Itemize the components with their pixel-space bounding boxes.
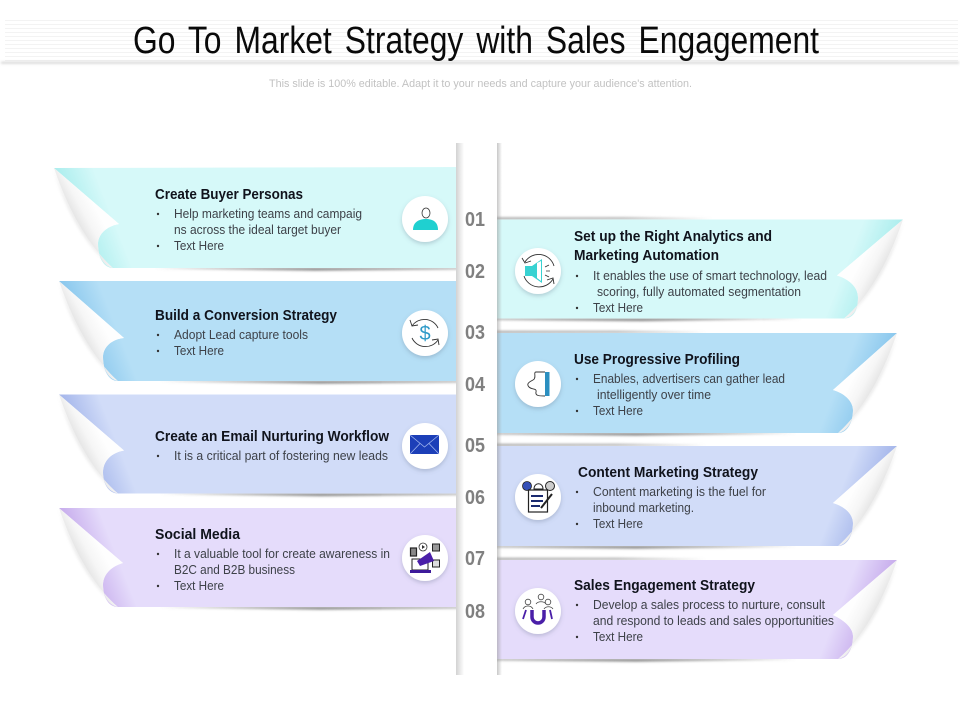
body text [157, 327, 308, 358]
panel: analytics and marketing automation [492, 218, 903, 321]
panel: create an email nurturing workflow [59, 394, 470, 496]
body text: Text Here [593, 300, 643, 315]
body text: Text Here [174, 578, 224, 593]
ribbon 5 [492, 218, 903, 321]
subtitle: This slide is 100% editable. Adapt it to your needs and capture your audience's attention. [269, 78, 692, 90]
step numbers: 05 [465, 435, 485, 457]
body text [576, 597, 834, 644]
title: Go To Market Strategy with Sales Engagement [133, 20, 819, 62]
header band [1, 18, 959, 64]
center band [456, 143, 502, 675]
body text: scoring, fully automated segmentation [597, 284, 801, 299]
heading: Set up the Right Analytics and [574, 229, 772, 245]
ribbon 2 [59, 281, 470, 384]
body text [157, 546, 390, 593]
body text: inbound marketing. [593, 500, 694, 515]
ribbon 8 [486, 558, 897, 662]
heading: Content Marketing Strategy [578, 465, 758, 481]
icon: person [402, 196, 448, 242]
body text: Adopt Lead capture tools [174, 327, 308, 342]
body text: Text Here [593, 403, 643, 418]
body text: Text Here [593, 516, 643, 531]
panel: build a conversion strategy [59, 281, 470, 384]
body text: Content marketing is the fuel for [593, 484, 767, 499]
step numbers: 01 [465, 209, 485, 231]
icon: content clipboard [515, 474, 561, 520]
body text: ns across the ideal target buyer [174, 222, 342, 237]
icon: profile door [515, 361, 561, 407]
body text [157, 206, 362, 253]
body text: It a valuable tool for create awareness in [174, 546, 390, 561]
heading: Sales Engagement Strategy [574, 578, 755, 594]
ribbon 6 [486, 331, 897, 436]
icon: dollar cycle: $ [419, 323, 431, 345]
step numbers: 03 [465, 322, 485, 344]
panel: sales engagement strategy [486, 558, 897, 662]
body text: Text Here [174, 343, 224, 358]
step numbers: 02 [465, 261, 485, 283]
body text: It is a critical part of fostering new leads [174, 448, 388, 463]
heading: Build a Conversion Strategy [155, 308, 337, 324]
step numbers: 07 [465, 548, 485, 570]
heading: Use Progressive Profiling [574, 352, 740, 368]
ribbon 4 [59, 508, 470, 610]
heading: Create Buyer Personas [155, 187, 303, 203]
icon: magnet and people [515, 588, 561, 634]
body text: intelligently over time [597, 387, 711, 402]
heading: Social Media [155, 527, 241, 543]
body text: Text Here [174, 238, 224, 253]
icon: megaphone cycle [515, 248, 561, 294]
body text: Develop a sales process to nurture, consult [593, 597, 825, 612]
panel: social media [59, 508, 470, 610]
body text: Text Here [593, 629, 643, 644]
panel: create buyer personas [54, 167, 465, 270]
panel: use progressive profiling [486, 331, 897, 436]
body text: Help marketing teams and campaig [174, 206, 362, 221]
body text: Enables, advertisers can gather lead [593, 371, 785, 386]
body text: and respond to leads and sales opportunities [593, 613, 834, 628]
icon: mail [402, 423, 448, 469]
step numbers: 06 [465, 487, 485, 509]
body text [576, 268, 827, 315]
heading: Marketing Automation [574, 248, 719, 264]
ribbon 1 [54, 167, 465, 270]
heading [574, 229, 772, 264]
step numbers: 04 [465, 374, 486, 396]
heading: Create an Email Nurturing Workflow [155, 429, 390, 445]
ribbon 3 [59, 394, 470, 496]
body text [576, 484, 767, 531]
body text [576, 371, 785, 418]
step numbers: 08 [465, 601, 485, 623]
panel: content marketing strategy [486, 444, 897, 548]
icon: dollar cycle [402, 310, 448, 356]
icon: social megaphone [402, 535, 448, 581]
body text: B2C and B2B business [174, 562, 295, 577]
step numbers [465, 209, 486, 623]
ribbon 7 [486, 444, 897, 548]
body text: It enables the use of smart technology, lead [593, 268, 827, 283]
